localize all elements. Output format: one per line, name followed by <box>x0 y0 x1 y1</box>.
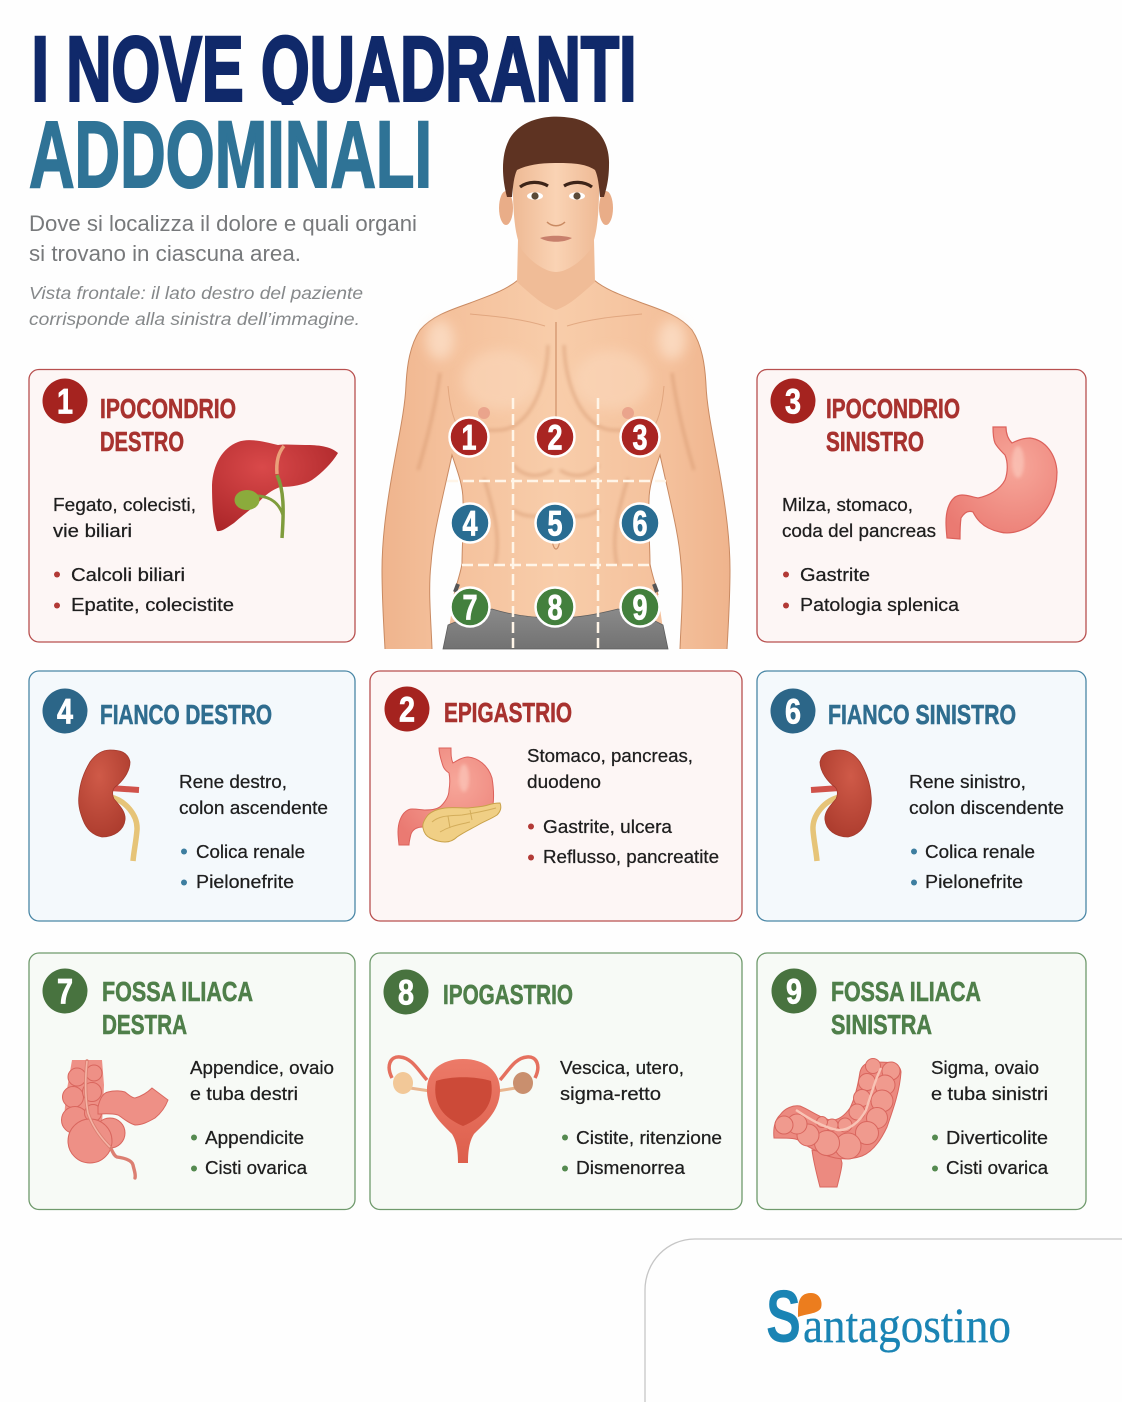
logo wordmark: S <box>766 1275 801 1358</box>
icon: sigmoid colon <box>774 1058 901 1187</box>
conditions: Patologia splenica <box>800 595 960 615</box>
organs <box>560 1058 684 1104</box>
neck <box>517 240 595 310</box>
badge 9 <box>772 968 816 1014</box>
organs <box>931 1058 1048 1104</box>
heading: DESTRO <box>100 426 184 457</box>
organs: colon discendente <box>909 798 1064 818</box>
heading <box>826 393 960 457</box>
body illustration: 9 <box>632 588 648 628</box>
heading <box>100 393 236 457</box>
title: I NOVE QUADRANTI <box>32 18 636 120</box>
icon: liver <box>212 440 338 538</box>
body illustration: 6 <box>632 504 648 544</box>
icon: stomach and pancreas <box>398 748 501 845</box>
conditions: Gastrite <box>800 565 870 585</box>
body illustration: 5 <box>548 504 562 544</box>
conditions: Calcoli biliari <box>71 565 185 585</box>
heading: EPIGASTRIO <box>444 697 572 728</box>
conditions: Dismenorrea <box>576 1158 686 1178</box>
organs: colon ascendente <box>179 798 328 818</box>
note: corrisponde alla sinistra dell’immagine. <box>29 309 360 329</box>
badge 7 <box>42 968 88 1014</box>
badge 2 <box>384 686 430 732</box>
conditions <box>191 1128 308 1178</box>
badge 6: 6 <box>785 692 801 732</box>
badge 4: 4 <box>57 692 73 732</box>
organs: Stomaco, pancreas, <box>527 746 693 766</box>
torso and arms <box>382 262 730 649</box>
note: Vista frontale: il lato destro del paziente <box>29 283 363 303</box>
heading: SINISTRO <box>826 426 924 457</box>
heading: FOSSA ILIACA <box>102 976 253 1007</box>
body illustration: 2 <box>548 418 562 458</box>
conditions: Appendicite <box>205 1128 304 1148</box>
panel: 3 ipocondrio sinistro <box>757 370 1086 642</box>
subtitle: Dove si localizza il dolore e quali organi <box>29 211 417 236</box>
subtitle <box>29 211 417 266</box>
note <box>29 283 363 329</box>
conditions: Gastrite, ulcera <box>543 817 673 837</box>
heading: IPOCONDRIO <box>826 393 960 424</box>
badge 8 <box>384 970 428 1014</box>
organs: e tuba destri <box>190 1084 298 1104</box>
organs: Rene sinistro, <box>909 772 1026 792</box>
badge 1: 1 <box>57 382 73 422</box>
badge 7: 7 <box>57 972 73 1012</box>
conditions: Cistite, ritenzione <box>576 1128 722 1148</box>
heading: FOSSA ILIACA <box>831 976 981 1007</box>
conditions: Diverticolite <box>946 1128 1048 1148</box>
panel: 9 fossa iliaca sinistra <box>757 953 1086 1210</box>
organs: sigma-retto <box>560 1084 661 1104</box>
heading: SINISTRA <box>831 1009 932 1040</box>
organs: Rene destro, <box>179 772 287 792</box>
organs <box>53 495 196 541</box>
heading: FIANCO SINISTRO <box>828 699 1016 730</box>
badge 9: 9 <box>786 972 802 1012</box>
organs: Milza, stomaco, <box>782 495 913 515</box>
panel: 6 fianco sinistro <box>757 671 1086 921</box>
icon: left kidney <box>811 750 871 861</box>
conditions: Epatite, colecistite <box>71 595 234 615</box>
organs <box>179 772 328 818</box>
title: ADDOMINALI <box>29 102 432 208</box>
quadrant grid <box>447 398 667 648</box>
badge 2: 2 <box>399 690 415 730</box>
organs <box>782 495 936 541</box>
dark waistband sides <box>455 584 657 592</box>
organs: e tuba sinistri <box>931 1084 1048 1104</box>
conditions <box>181 842 305 892</box>
icon: right kidney <box>79 750 139 861</box>
icon: uterus and bladder <box>389 1057 538 1163</box>
panel: 8 ipogastrio <box>370 953 742 1210</box>
logo wordmark <box>766 1275 1011 1358</box>
conditions <box>528 817 719 867</box>
organs <box>190 1058 334 1104</box>
heading <box>831 976 981 1040</box>
logo wordmark: antagostino <box>803 1297 1011 1353</box>
body illustration: 8 <box>548 588 562 628</box>
conditions <box>54 565 234 615</box>
conditions: Cisti ovarica <box>205 1158 308 1178</box>
organs: coda del pancreas <box>782 521 936 541</box>
organs <box>527 746 693 792</box>
conditions: Reflusso, pancreatite <box>543 847 719 867</box>
subtitle: si trovano in ciascuna area. <box>29 241 301 266</box>
panel: 2 epigastrio <box>370 671 742 921</box>
icon: stomach <box>946 427 1057 539</box>
head <box>499 117 613 272</box>
conditions <box>932 1128 1049 1178</box>
conditions: Colica renale <box>925 842 1035 862</box>
organs: Appendice, ovaio <box>190 1058 334 1078</box>
badge 6 <box>770 688 816 734</box>
organs: Fegato, colecisti, <box>53 495 196 515</box>
icon: caecum and appendix <box>62 1060 168 1178</box>
conditions <box>783 565 960 615</box>
number markers <box>450 418 660 626</box>
panel: 7 fossa iliaca destra <box>29 953 355 1210</box>
heading: DESTRA <box>102 1009 187 1040</box>
organs: duodeno <box>527 772 601 792</box>
body illustration: 7 <box>462 588 478 628</box>
footer panel <box>645 1239 1122 1402</box>
heading: FIANCO DESTRO <box>100 699 272 730</box>
body illustration: 4 <box>462 504 478 544</box>
heading <box>102 976 253 1040</box>
heading: IPOGASTRIO <box>443 979 573 1010</box>
organs: Sigma, ovaio <box>931 1058 1039 1078</box>
conditions: Cisti ovarica <box>946 1158 1049 1178</box>
badge 3: 3 <box>785 382 801 422</box>
body illustration: 3 <box>632 418 648 458</box>
organs <box>909 772 1064 818</box>
conditions <box>562 1128 722 1178</box>
conditions: Colica renale <box>196 842 305 862</box>
organs: Vescica, utero, <box>560 1058 684 1078</box>
body illustration: 1 <box>462 418 476 458</box>
organs: vie biliari <box>53 521 132 541</box>
badge 3 <box>770 378 816 424</box>
badge 8: 8 <box>398 974 414 1012</box>
logo <box>766 1275 1011 1358</box>
conditions: Pielonefrite <box>196 872 294 892</box>
title <box>30 34 634 189</box>
body illustration <box>382 117 730 649</box>
panel: 4 fianco destro <box>29 671 355 921</box>
logo heart <box>798 1293 822 1317</box>
heading: IPOCONDRIO <box>100 393 236 424</box>
conditions <box>911 842 1035 892</box>
conditions: Pielonefrite <box>925 872 1023 892</box>
badge 4 <box>42 688 88 734</box>
waistband shorts <box>443 609 668 649</box>
badge 1 <box>42 378 88 424</box>
panel: 1 ipocondrio destro <box>29 370 355 642</box>
